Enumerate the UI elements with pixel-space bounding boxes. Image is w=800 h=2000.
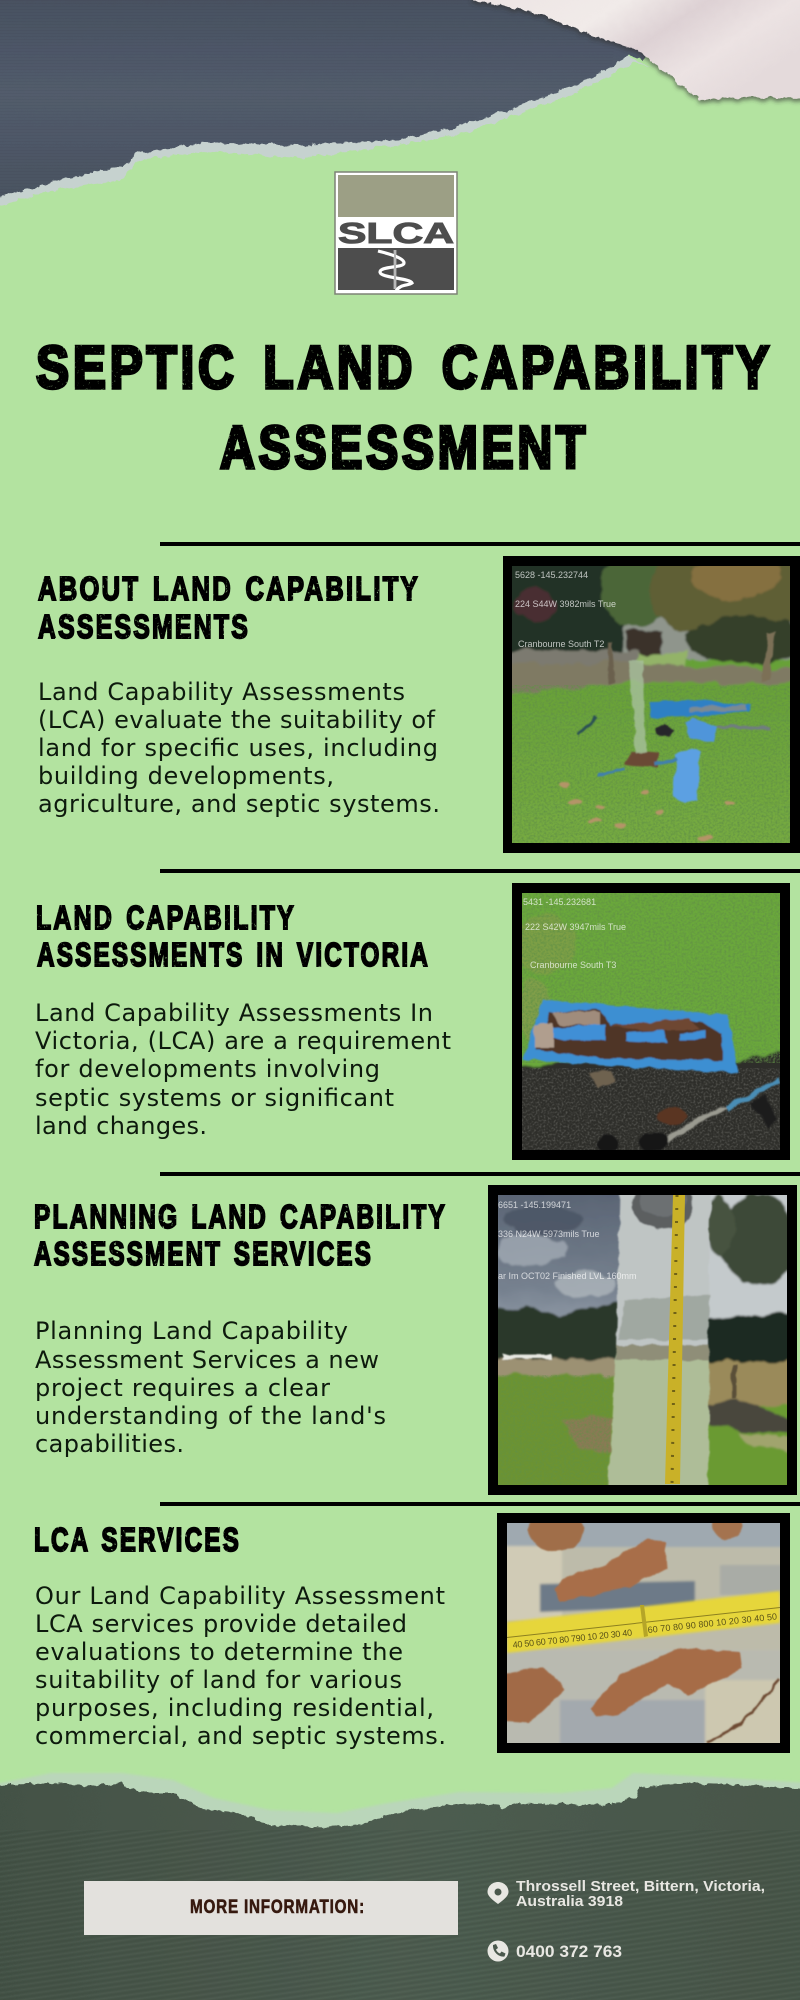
heading [36, 899, 430, 973]
body text: Land Capability Assessments In [35, 999, 433, 1027]
contact: address: Australia 3918 [516, 1893, 623, 1910]
photo: soil on blue tarp: 5431 -145.232681 [523, 897, 596, 907]
panel: land capability assessments in victoria [35, 880, 800, 1165]
heading: ABOUT LAND CAPABILITY [38, 570, 420, 607]
panel: about land capability assessments [38, 540, 800, 865]
icon: auger [378, 250, 412, 291]
body text: agriculture, and septic systems. [38, 790, 440, 818]
body text: for developments involving [35, 1055, 380, 1083]
heading: ASSESSMENT SERVICES [34, 1235, 373, 1272]
photo: measuring tube in field [480, 1180, 800, 1500]
body text: Our Land Capability Assessment [35, 1582, 445, 1610]
photo: soil samples with ruler: 60 70 80 90 800 10 20 30 40 50 [647, 1611, 777, 1635]
body text: land changes. [35, 1112, 207, 1140]
torn paper footer [0, 1773, 800, 2000]
body text: suitability of land for various [35, 1666, 402, 1694]
contact: address: Throssell Street, Bittern, Victoria, [516, 1878, 765, 1895]
photo: measuring tube in field: ar Im OCT02 Finished LVL 160mm [498, 1271, 637, 1281]
body text: LCA services provide detailed [35, 1610, 407, 1638]
title: ASSESSMENT [220, 414, 589, 481]
body text: project requires a clear [35, 1374, 330, 1402]
body text: septic systems or significant [35, 1084, 394, 1112]
photo: infiltration test on lawn [503, 556, 800, 853]
body text [35, 1317, 386, 1458]
photo: infiltration test on lawn: Cranbourne South T2 [518, 639, 604, 649]
photo: soil on blue tarp [505, 880, 800, 1165]
heading [34, 1198, 447, 1272]
body text: commercial, and septic systems. [35, 1722, 446, 1750]
heading: LAND CAPABILITY [36, 899, 296, 936]
body text [35, 1582, 446, 1750]
button: more information [84, 1881, 458, 1935]
logo: SLCA: SLCA [338, 218, 454, 250]
photo: infiltration test on lawn: 5628 -145.232744 [515, 570, 588, 580]
heading: LCA SERVICES [34, 1521, 241, 1558]
body text: building developments, [38, 762, 334, 790]
body text: evaluations to determine the [35, 1638, 403, 1666]
heading: PLANNING LAND CAPABILITY [34, 1198, 447, 1235]
title [36, 334, 773, 481]
body text: (LCA) evaluate the suitability of [38, 706, 436, 734]
heading [38, 570, 420, 645]
body text [38, 678, 440, 818]
photo: infiltration test on lawn: 224 S44W 3982mils True [515, 599, 616, 609]
photo: measuring tube in field: 336 N24W 5973mils True [498, 1229, 600, 1239]
body text: purposes, including residential, [35, 1694, 434, 1722]
photo: soil samples with ruler: 40 50 60 70 80 790 10 20 30 40 [512, 1628, 633, 1650]
panel: lca services [34, 1509, 795, 1755]
photo: soil on blue tarp: 222 S42W 3947mils True [525, 922, 626, 932]
photo: soil on blue tarp: Cranbourne South T3 [530, 960, 616, 970]
button: more information: MORE INFORMATION: [190, 1897, 365, 1918]
heading: ASSESSMENTS IN VICTORIA [37, 936, 430, 973]
body text [35, 999, 451, 1140]
body text: Victoria, (LCA) are a requirement [35, 1027, 451, 1055]
body text: Land Capability Assessments [38, 678, 405, 706]
icon: location pin [488, 1882, 508, 1904]
heading: ASSESSMENTS [38, 608, 250, 645]
contact: address [516, 1878, 765, 1910]
body text: capabilities. [35, 1430, 184, 1458]
photo: measuring tube in field: 6651 -145.199471 [498, 1200, 571, 1210]
logo: SLCA [335, 172, 457, 294]
body text: land for specific uses, including [38, 734, 438, 762]
body text: Planning Land Capability [35, 1317, 348, 1345]
icon: phone [488, 1940, 508, 1962]
contact: phone number: 0400 372 763 [516, 1942, 622, 1961]
panel: planning land capability assessment services [34, 1180, 800, 1500]
body text: Assessment Services a new [35, 1346, 379, 1374]
torn paper header [0, 0, 800, 205]
body text: understanding of the land's [35, 1402, 386, 1430]
photo: soil samples with ruler [495, 1509, 795, 1755]
